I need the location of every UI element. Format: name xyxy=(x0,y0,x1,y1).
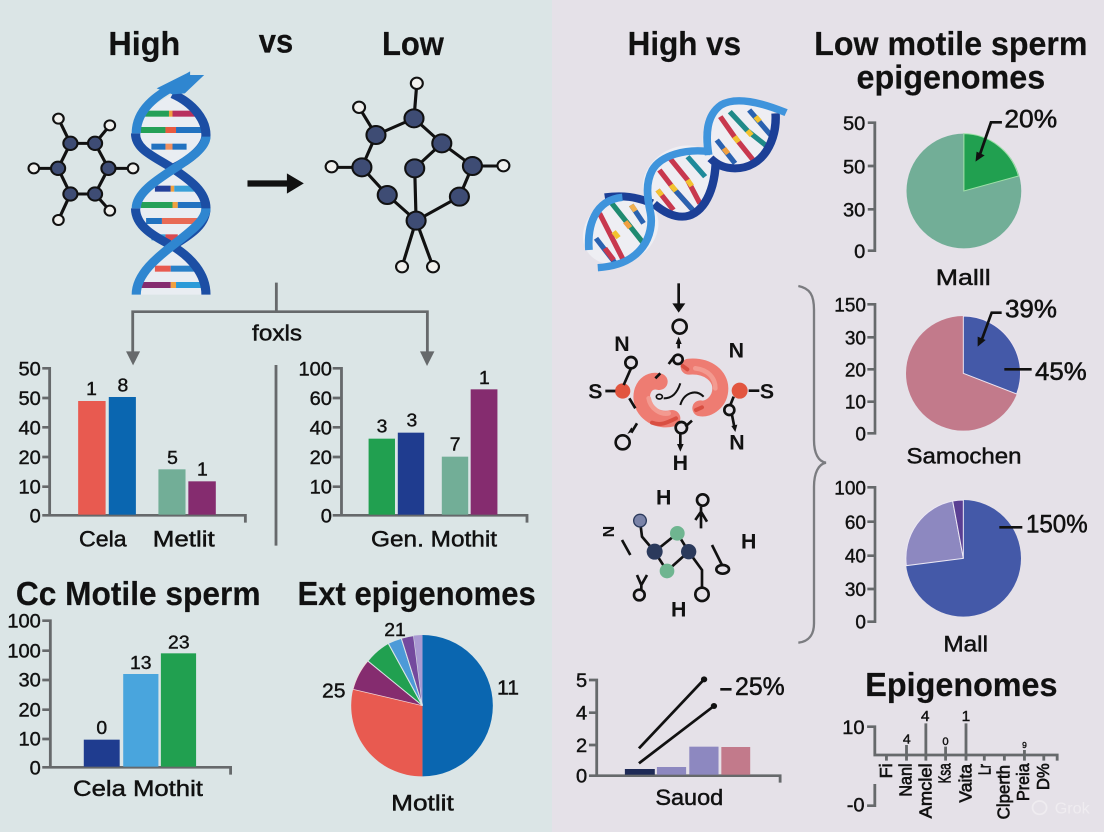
arrow: branching connector xyxy=(126,283,434,366)
pie chart: Mall: 100 xyxy=(834,479,866,500)
pie chart: Samochen: 45% xyxy=(1035,359,1087,386)
pie chart: Samochen xyxy=(834,296,1087,468)
bar chart: Sauod: 25% xyxy=(735,674,785,701)
lollipop chart: Epigenomes: Nanl xyxy=(895,763,916,797)
icon: red enzyme molecule: S xyxy=(588,379,602,403)
lollipop chart: Epigenomes: -0 xyxy=(847,795,865,817)
panel: right stacked pies xyxy=(798,286,1088,657)
lollipop chart: Epigenomes xyxy=(842,708,1057,819)
lollipop chart: Epigenomes: Fi xyxy=(876,763,896,778)
icon: green and navy molecule: H xyxy=(671,598,686,622)
heading: Epigenomes: Epigenomes xyxy=(865,667,1058,704)
lollipop chart: Epigenomes: 10 xyxy=(842,717,865,739)
heading: Low motile sperm epigenomes: Low motile sperm xyxy=(814,26,1087,63)
bar chart: Gen. Mothit: 3 xyxy=(407,410,417,431)
bar chart: Cela Metlit: Metlit xyxy=(153,527,216,552)
bar chart: Cela Metlit: 1 xyxy=(197,459,208,480)
bar chart: Cela Mothit: 0 xyxy=(30,758,41,779)
pie chart: Malll 20% xyxy=(843,106,1057,290)
lollipop chart: Epigenomes: Clperth xyxy=(993,765,1014,819)
text: foxls: foxls xyxy=(252,321,302,346)
pie chart: Malll 20%: Malll xyxy=(936,266,991,290)
bar chart: Cela Mothit: 30 xyxy=(19,670,41,692)
panel: left middle charts xyxy=(19,283,527,552)
lollipop chart: Epigenomes: Preia xyxy=(1013,763,1033,801)
heading: High: High xyxy=(108,26,180,63)
icon: red enzyme molecule: N xyxy=(614,332,630,356)
bar chart: Cela Metlit: Cela xyxy=(79,527,127,552)
pie chart: Malll 20%: 30 xyxy=(843,200,865,222)
icon: green and navy molecule xyxy=(601,485,756,622)
pie chart: Malll 20%: 20% xyxy=(1004,106,1057,133)
bar chart: Sauod xyxy=(576,670,785,810)
icon: red enzyme molecule: N xyxy=(729,339,744,363)
bar chart: Cela Mothit: 20 xyxy=(19,700,41,721)
pie chart: Motlit xyxy=(322,619,519,816)
lollipop chart: Epigenomes: D% xyxy=(1033,763,1053,790)
brace grouping pie charts xyxy=(798,286,826,643)
icon: green and navy molecule: H xyxy=(656,485,671,509)
heading: vs: vs xyxy=(259,23,293,60)
bar chart: Gen. Mothit: 10 xyxy=(310,477,332,498)
lollipop chart: Epigenomes: Ksa xyxy=(934,763,955,783)
lollipop chart: Epigenomes: 1 xyxy=(962,708,970,725)
panel: right bottom section xyxy=(576,667,1090,819)
bar chart: Gen. Mothit: Gen. Mothit xyxy=(371,527,498,552)
heading: Low motile sperm epigenomes xyxy=(814,26,1087,96)
bar chart: Gen. Mothit: 3 xyxy=(377,416,387,437)
icon: red enzyme molecule: S xyxy=(760,379,774,403)
watermark: Grok xyxy=(1033,801,1090,817)
bar chart: Gen. Mothit: 100 xyxy=(299,359,332,380)
bar chart: Sauod: Sauod xyxy=(655,786,723,810)
bar chart: Gen. Mothit: 0 xyxy=(321,506,332,527)
pie chart: Mall: Mall xyxy=(943,632,988,657)
bar chart: Sauod: 5 xyxy=(576,670,587,692)
pie chart: Mall: 40 xyxy=(845,547,866,568)
panel: left top section xyxy=(29,23,509,295)
icon: red enzyme molecule xyxy=(588,283,774,475)
bar chart: Sauod: 0 xyxy=(576,766,587,788)
watermark: Grok: Grok xyxy=(1055,801,1090,817)
pie chart: Malll 20%: 0 xyxy=(854,241,865,263)
heading: Ext epigenomes: Ext epigenomes xyxy=(297,576,536,613)
panel: right molecules xyxy=(588,283,774,622)
bar chart: Cela Metlit: 40 xyxy=(19,418,41,439)
bar chart: Cela Metlit: 8 xyxy=(117,375,128,396)
heading: Cc Motile sperm: Cc Motile sperm xyxy=(16,576,261,613)
bar chart: Cela Mothit: 13 xyxy=(130,652,152,673)
bar chart: Cela Mothit: 10 xyxy=(19,729,41,751)
icon: green and navy molecule: N xyxy=(601,526,618,537)
panel: right background xyxy=(552,0,1104,832)
lollipop chart: Epigenomes: Lr xyxy=(974,764,995,775)
bar chart: Cela Mothit: 100 xyxy=(7,641,41,662)
pie chart: Malll 20%: 50 xyxy=(843,157,865,178)
bar chart: Gen. Mothit xyxy=(299,359,527,552)
bar chart: Cela Metlit: 0 xyxy=(30,506,41,527)
bar chart: Gen. Mothit: 7 xyxy=(450,434,461,455)
bar chart: Cela Metlit: 50 xyxy=(19,388,41,410)
bar chart: Cela Mothit xyxy=(7,611,231,801)
bar chart: Cela Metlit: 50 xyxy=(19,359,41,380)
bar chart: Cela Metlit: 20 xyxy=(19,447,41,469)
icon: diagonal DNA helix xyxy=(568,85,793,279)
icon: hexagonal molecule xyxy=(29,114,138,225)
pie chart: Samochen: 0 xyxy=(855,424,866,445)
bar chart: Gen. Mothit: 40 xyxy=(310,418,332,439)
icon: green and navy molecule: H xyxy=(741,529,756,553)
bar chart: Cela Metlit: 5 xyxy=(167,447,178,468)
panel: left background xyxy=(0,0,552,832)
bar chart: Cela Metlit xyxy=(19,359,245,552)
icon: disordered molecule xyxy=(326,78,509,272)
pie chart: Mall xyxy=(834,479,1088,657)
pie chart: Malll 20%: 50 xyxy=(843,113,865,135)
pie chart: Motlit: 11 xyxy=(497,677,519,699)
icon: vertical DNA helix xyxy=(136,71,206,295)
bar chart: Cela Metlit: 10 xyxy=(19,477,41,498)
pie chart: Samochen: Samochen xyxy=(906,443,1021,468)
heading: Low: Low xyxy=(382,26,444,63)
bar chart: Sauod: 4 xyxy=(576,703,587,725)
pie chart: Motlit: 21 xyxy=(384,619,406,640)
heading: Low motile sperm epigenomes: epigenomes xyxy=(857,59,1045,96)
pie chart: Samochen: 30 xyxy=(845,328,866,349)
lollipop chart: Epigenomes: 4 xyxy=(903,732,911,746)
pie chart: Motlit: Motlit xyxy=(391,791,455,816)
pie chart: Mall: 0 xyxy=(855,613,866,634)
pie chart: Samochen: 10 xyxy=(845,393,866,414)
bar chart: Cela Metlit: 1 xyxy=(86,378,97,399)
icon: red enzyme molecule: N xyxy=(729,430,745,454)
heading: High vs: High vs xyxy=(628,26,741,63)
lollipop chart: Epigenomes: Amclel xyxy=(915,763,936,818)
pie chart: Samochen: 39% xyxy=(1005,297,1057,324)
bar chart: Cela Mothit: 0 xyxy=(96,717,107,738)
lollipop chart: Epigenomes: 4 xyxy=(921,708,929,725)
pie chart: Motlit: 25 xyxy=(322,680,345,702)
pie chart: Samochen: 20 xyxy=(845,360,866,381)
bar chart: Gen. Mothit: 60 xyxy=(310,388,332,410)
lollipop chart: Epigenomes: 0 xyxy=(942,736,949,748)
pie chart: Mall: 60 xyxy=(845,513,866,534)
bar chart: Gen. Mothit: 1 xyxy=(479,367,490,388)
icon: red enzyme molecule: H xyxy=(673,451,688,475)
panel: right top section xyxy=(568,26,1087,290)
pie chart: Mall: 150% xyxy=(1026,512,1088,539)
bar chart: Cela Mothit: Cela Mothit xyxy=(73,777,204,801)
bar chart: Cela Mothit: 100 xyxy=(7,611,41,633)
panel: left bottom section xyxy=(7,576,536,816)
bar chart: Gen. Mothit: 20 xyxy=(310,447,332,469)
bar chart: Sauod: 2 xyxy=(576,735,587,757)
pie chart: Samochen: 150 xyxy=(834,296,866,317)
lollipop chart: Epigenomes: Vaita xyxy=(955,764,975,803)
pie chart: Mall: 30 xyxy=(845,580,866,601)
bar chart: Cela Mothit: 23 xyxy=(168,632,190,652)
lollipop chart: Epigenomes: 9 xyxy=(1022,741,1027,750)
arrow: high to low xyxy=(247,173,304,194)
divider between charts xyxy=(272,365,280,546)
